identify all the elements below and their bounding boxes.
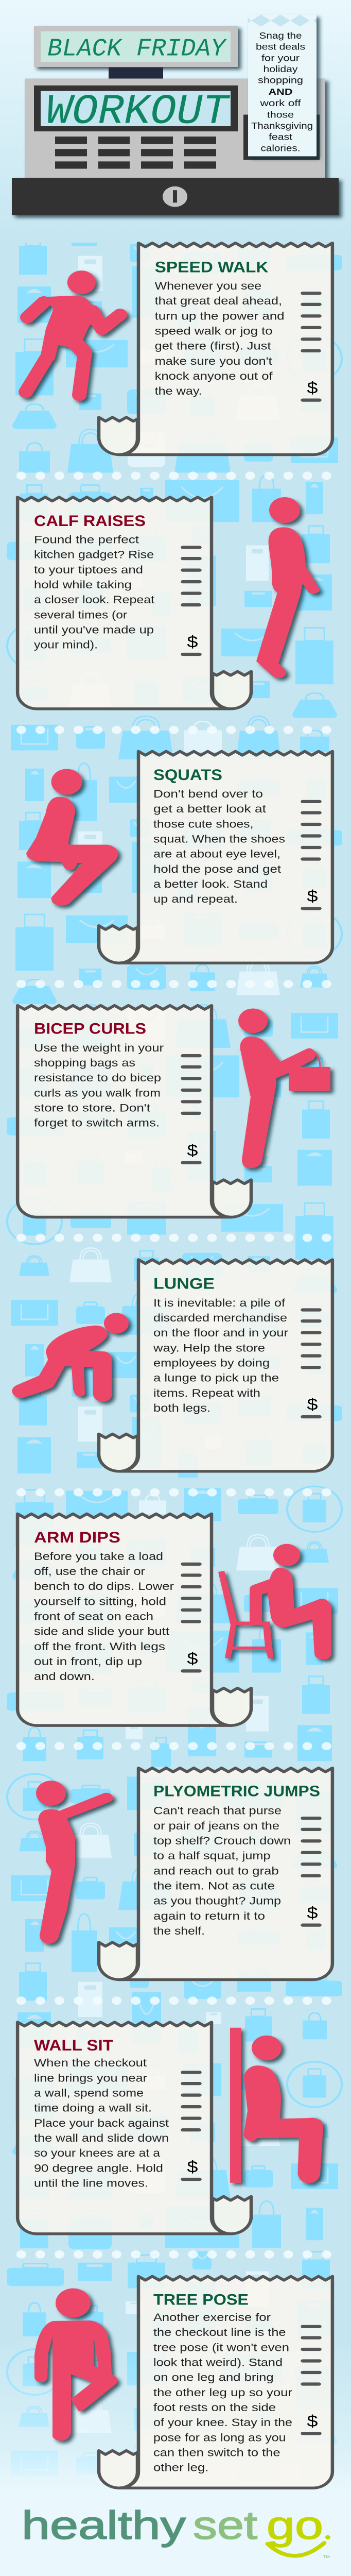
panel: arm dips <box>17 1514 331 1725</box>
body text: time doing a wall sit. <box>34 2102 152 2114</box>
dollar sign: $ <box>187 1650 198 1668</box>
body text <box>34 1550 174 1683</box>
body text: of your knee. Stay in the <box>153 2416 292 2429</box>
dollar sign: $ <box>307 2412 318 2430</box>
body text: Found the perfect <box>34 534 139 546</box>
receipt lines <box>303 1310 320 1417</box>
receipt <box>17 2022 251 2234</box>
receipt <box>99 1768 332 1979</box>
panel: speed walk <box>26 243 332 454</box>
cash drawer <box>12 178 339 215</box>
figure: arm dips on chair <box>218 1544 331 1659</box>
body text: until the line moves. <box>34 2177 148 2189</box>
panel: tree pose <box>34 2276 332 2488</box>
heading: speed walk: SPEED WALK <box>155 259 269 276</box>
body text: shopping bags as <box>34 1057 135 1069</box>
body text: a lunge to pick up the <box>153 1372 279 1384</box>
heading: plyometric jumps: PLYOMETRIC JUMPS <box>153 1783 320 1800</box>
receipt lines <box>183 1056 200 1163</box>
upper display <box>34 26 238 67</box>
body text: several times (or <box>34 608 127 621</box>
dollar sign: $ <box>187 633 198 651</box>
register neck <box>109 67 163 78</box>
body text <box>34 1042 164 1129</box>
heading: lunge: LUNGE <box>153 1275 215 1293</box>
receipt <box>99 1260 332 1471</box>
body text: way. Help the store <box>153 1342 265 1354</box>
logo: healthy set go <box>22 2503 330 2559</box>
dollar sign: $ <box>307 887 318 905</box>
body text: both legs. <box>153 1402 210 1414</box>
dollar sign: $ <box>187 1141 198 1160</box>
body text: hold while taking <box>34 579 132 591</box>
body text: yourself to sitting, hold <box>34 1595 166 1607</box>
body text: Whenever you see <box>155 280 261 292</box>
body text: resistance to do bicep <box>34 1072 161 1084</box>
logo: healthy set go: TM <box>323 2555 330 2559</box>
body text: the way. <box>155 385 202 397</box>
receipt lines <box>303 2327 320 2433</box>
body text: to your tiptoes and <box>34 564 143 575</box>
header receipt: AND <box>269 88 293 97</box>
body text <box>34 2057 169 2189</box>
body text: the other leg up so your <box>153 2386 292 2398</box>
header receipt: feast <box>269 132 293 142</box>
body text: speed walk or jog to <box>155 325 273 337</box>
body text: on the floor and in your <box>153 1327 288 1339</box>
heading: squats: SQUATS <box>153 767 222 784</box>
header receipt: for your <box>261 54 300 63</box>
receipt slot <box>243 114 320 160</box>
logo: healthy set go: go <box>267 2503 323 2547</box>
body text: again to return it to <box>153 1910 265 1922</box>
body text: knock anyone out of <box>155 370 273 382</box>
receipt <box>99 751 332 963</box>
panel: lunge <box>12 1260 332 1471</box>
header receipt: holiday <box>264 65 298 75</box>
figure: bicep curls with bag <box>238 1009 330 1168</box>
body text: top shelf? Crouch down <box>153 1835 291 1847</box>
body text: store to store. Don't <box>34 1101 151 1114</box>
header receipt: calories. <box>261 144 301 154</box>
body text: off, use the chair or <box>34 1565 145 1578</box>
body text: side and slide your butt <box>34 1625 170 1637</box>
body text: your mind). <box>34 639 98 651</box>
dollar sign: $ <box>307 379 318 397</box>
body text: off the front. With legs <box>34 1640 165 1652</box>
body text <box>155 280 285 397</box>
body text <box>153 788 285 905</box>
header receipt: best deals <box>256 42 305 52</box>
body text: and reach out to grab <box>153 1865 279 1877</box>
body text: Place your back against <box>34 2117 169 2129</box>
body text: squat. When the shoes <box>153 833 285 845</box>
body text: those cute shoes, <box>153 818 253 830</box>
body text <box>153 1297 288 1414</box>
body text: and down. <box>34 1670 95 1683</box>
receipt <box>99 2276 332 2488</box>
body text: look that weird). Stand <box>153 2356 283 2368</box>
header receipt <box>248 14 317 156</box>
receipt <box>17 497 251 709</box>
figure: calf raises <box>256 497 320 678</box>
body text <box>153 1805 291 1937</box>
body text: or pair of jeans on the <box>153 1820 279 1832</box>
body text: until you've made up <box>34 624 154 636</box>
body text: out in front, dip up <box>34 1655 142 1668</box>
body text: It is inevitable: a pile of <box>153 1297 286 1309</box>
header receipt: Snag the <box>259 31 302 41</box>
panel: squats <box>26 751 332 963</box>
body text: the checkout line is the <box>153 2326 286 2338</box>
body text: Don't bend over to <box>153 788 263 800</box>
body text: line brings you near <box>34 2072 147 2084</box>
receipt <box>17 1514 251 1725</box>
body text: so your knees are at a <box>34 2147 160 2159</box>
heading: tree pose: TREE POSE <box>153 2291 249 2309</box>
figure: speed walk <box>26 270 120 395</box>
figure: lunge <box>12 1313 129 1402</box>
receipt lines <box>183 2072 200 2179</box>
body text: that great deal ahead, <box>155 295 282 307</box>
dollar sign: $ <box>307 1904 318 1922</box>
register body <box>25 78 325 178</box>
body text: bench to do dips. Lower <box>34 1580 174 1592</box>
heading: arm dips: ARM DIPS <box>34 1529 120 1546</box>
bottom background fade <box>0 2340 351 2576</box>
body text: discarded merchandise <box>153 1312 287 1324</box>
body text: get a better look at <box>153 803 267 815</box>
receipt lines <box>303 802 320 908</box>
panel: bicep curls <box>17 1006 330 1217</box>
figure: squats <box>26 769 118 906</box>
panel: calf raises <box>17 497 320 709</box>
header receipt: shopping <box>258 76 303 86</box>
body text: the wall and slide down <box>34 2132 169 2144</box>
body text: front of seat on each <box>34 1611 153 1622</box>
body text: pose for as long as you <box>153 2431 286 2444</box>
body text: Use the weight in your <box>34 1042 164 1054</box>
receipt lines <box>183 1564 200 1671</box>
body text: 90 degree angle. Hold <box>34 2162 163 2174</box>
receipt <box>99 243 332 454</box>
body text: get there (first). Just <box>155 340 271 352</box>
body text: Can't reach that purse <box>153 1805 282 1817</box>
body text: on one leg and bring <box>153 2371 274 2383</box>
body text: a closer look. Repeat <box>34 594 155 606</box>
cash register header <box>12 14 339 215</box>
body text: foot rests on the side <box>153 2401 276 2414</box>
body text: When the checkout <box>34 2057 147 2069</box>
body text: kitchen gadget? Rise <box>34 549 154 561</box>
body text: as you thought? Jump <box>153 1895 281 1907</box>
heading: calf raises: CALF RAISES <box>34 513 146 530</box>
body text: a wall, spend some <box>34 2087 144 2099</box>
body text: forget to switch arms. <box>34 1117 160 1129</box>
header receipt: Thanksgiving <box>251 122 313 131</box>
body text: are at about eye level, <box>153 848 280 860</box>
panel: wall sit <box>17 2022 323 2234</box>
receipt lines <box>183 547 200 654</box>
header receipt: those <box>267 110 294 120</box>
body text: tree pose (it won't even <box>153 2341 289 2353</box>
body text: turn up the power and <box>155 310 285 322</box>
register keys <box>55 137 216 169</box>
main display: WORKOUT <box>46 88 231 136</box>
dollar sign: $ <box>307 1396 318 1414</box>
body text: the item. Not as cute <box>153 1879 275 1892</box>
body text: curls as you walk from <box>34 1087 161 1099</box>
figure: wall sit with wall <box>230 2028 323 2183</box>
body text: items. Repeat with <box>153 1387 260 1399</box>
body text: employees by doing <box>153 1357 270 1369</box>
heading: bicep curls: BICEP CURLS <box>34 1020 146 1038</box>
logo: healthy set go: set <box>193 2503 257 2547</box>
body text: up and repeat. <box>153 893 238 905</box>
body text: other leg. <box>153 2462 208 2473</box>
body text: hold the pose and get <box>153 863 282 875</box>
body text: Another exercise for <box>153 2311 271 2324</box>
body text: a better look. Stand <box>153 878 268 890</box>
body text: can then switch to the <box>153 2446 280 2459</box>
body text: the shelf. <box>153 1925 205 1937</box>
logo: healthy set go: healthy <box>22 2503 186 2547</box>
figure: plyometric jump <box>36 1781 113 1944</box>
body text: Before you take a load <box>34 1550 163 1562</box>
upper display: BLACK FRIDAY <box>47 36 227 63</box>
dotted separators <box>21 476 327 2255</box>
body text: make sure you don't <box>155 355 272 367</box>
dollar sign: $ <box>187 2158 198 2176</box>
body text: to a half squat, jump <box>153 1850 271 1862</box>
receipt <box>17 1006 251 1217</box>
body text <box>153 2311 292 2473</box>
header receipt: work off <box>259 99 301 109</box>
panel: plyometric jumps <box>36 1768 332 1979</box>
heading: wall sit: WALL SIT <box>34 2037 113 2054</box>
receipt lines <box>303 1818 320 1925</box>
figure: tree pose <box>34 2289 117 2441</box>
body text <box>34 534 155 651</box>
receipt lines <box>303 293 320 400</box>
